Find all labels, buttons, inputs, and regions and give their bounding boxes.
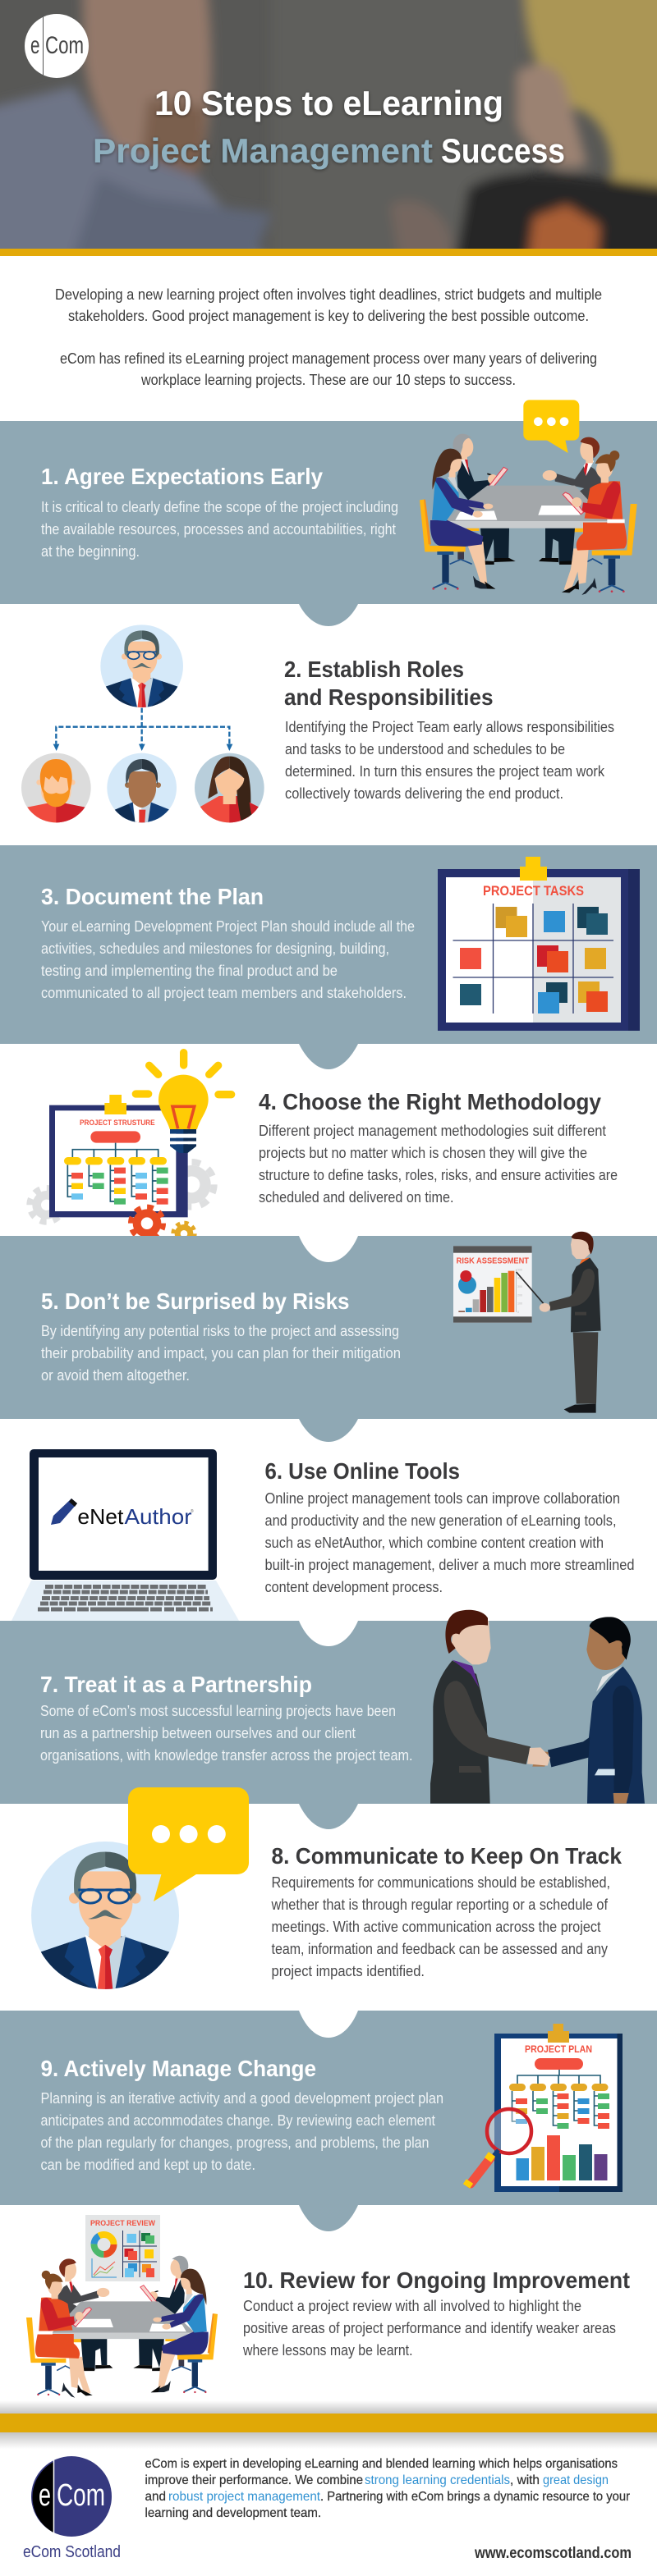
step 5 text: or avoid them altogether. [41,1367,190,1384]
illustration: presenter with risk assessment chart: 300 [517,1285,522,1288]
footer text: learning and development team. [145,2506,321,2520]
step 2 text: collectively towards delivering the end product. [285,785,563,802]
illustration: laptop with eNetAuthor: Author [125,1504,192,1529]
step 1 text: at the beginning. [41,543,140,560]
illustration: team meeting [420,400,637,595]
footer text: , with [510,2473,540,2487]
step 10 heading: 10. Review for Ongoing Improvement [243,2267,630,2293]
step 3 text [41,918,415,1001]
step 2 text: determined. In turn this ensures the project team work [285,763,605,780]
step 3 text: testing and implementing the final product and be [41,963,338,979]
intro text [55,286,602,388]
step 3 text: activities, schedules and milestones for designing, building, [41,940,389,957]
step 1 heading: 1. Agree Expectations Early [41,464,323,489]
step 5 text: By identifying any potential risks to the project and assessing [41,1323,399,1339]
footer text: and [145,2490,166,2504]
step 9 text: can be modified and kept up to date. [41,2157,255,2173]
footer text [145,2457,631,2520]
illustration: manager avatar [31,1842,179,1991]
step 9 text [41,2090,443,2173]
step 5 heading: 5. Don’t be Surprised by Risks [41,1288,350,1314]
footer text: strong learning credentials [365,2473,510,2487]
illustration: project review board: PROJECT REVIEW [90,2219,155,2228]
intro text: workplace learning projects. These are our 10 steps to success. [140,372,516,388]
illustration: presenter with risk assessment chart: 500 [517,1269,522,1272]
footer gold bar with shadow [0,2400,657,2449]
step 7 text: run as a partnership between ourselves and our client [40,1725,356,1741]
step 5 text: their probability and impact, you can plan for their mitigation [41,1345,401,1361]
step 4 text: scheduled and delivered on time. [259,1189,453,1206]
step 6 text: content development process. [264,1579,443,1595]
step 4 text: structure to define tasks, roles, risks, and ensure activities are [259,1167,618,1183]
step 2 text: and tasks to be understood and schedules to be [285,741,565,757]
step 4 heading: 4. Choose the Right Methodology [259,1089,601,1114]
panel: step 7 band [0,1621,657,1829]
step 8 heading: 8. Communicate to Keep On Track [271,1843,622,1869]
illustration: review meeting [26,2256,218,2398]
title: Success [441,131,565,170]
step 9 text: anticipates and accommodates change. By reviewing each element [41,2112,435,2129]
logo: eCom blue [31,2456,112,2537]
illustration: handshake [430,1610,645,1804]
step 8 text: team, information and feedback can be assessed and any [271,1941,608,1957]
footer text: robust project management [168,2490,321,2504]
step 3 heading: 3. Document the Plan [41,884,264,909]
step 6 text: Online project management tools can improve collaboration [264,1490,620,1507]
step 1 text: the available resources, processes and accountabilities, right [41,521,396,538]
illustration: presenter with risk assessment chart [453,1232,601,1413]
step 1 text [41,499,398,560]
illustration: laptop with eNetAuthor [11,1449,239,1621]
illustration: presenter with risk assessment chart: 200 [517,1293,522,1297]
intro text: stakeholders. Good project management is key to delivering the best possible outcome. [68,308,589,324]
logo: eCom white: e [30,32,39,59]
illustration: presenter with risk assessment chart: RISK ASSESSMENT [457,1256,529,1265]
logo: eCom white: Com [45,32,84,59]
step 8 text: Requirements for communications should be established, [271,1874,610,1891]
step 10 text: where lessons may be learnt. [242,2342,412,2359]
step 9 heading: 9. Actively Manage Change [41,2056,316,2081]
illustration: presenter with risk assessment chart: 400 [517,1277,522,1280]
step 7 heading: 7. Treat it as a Partnership [40,1672,312,1697]
footer text: improve their performance. We combine [145,2473,363,2487]
illustration: project review board [85,2215,160,2281]
step 2 heading [284,657,493,710]
step 5 text [41,1323,401,1384]
illustration: project plan clipboard with magnifier [466,2024,623,2192]
illustration: project team hierarchy [21,625,264,826]
step 2 heading: and Responsibilities [284,684,493,710]
step 6 heading: 6. Use Online Tools [264,1458,460,1484]
step 8 text: project impacts identified. [271,1963,425,1979]
title [93,84,565,170]
website: www.ecomscotland.com [474,2545,632,2562]
step 7 text: Some of eCom’s most successful learning projects have been [40,1703,396,1719]
step 2 heading: 2. Establish Roles [284,657,464,682]
step 9 text: of the plan regularly for changes, progress, and problems, the plan [41,2134,429,2151]
step 4 text: Different project management methodologies suit different [259,1123,606,1139]
illustration: laptop with eNetAuthor: eNet [77,1504,124,1529]
panel: step 3 band [0,845,657,1069]
step 4 text [259,1123,618,1206]
illustration: presenter with risk assessment chart: 0 [517,1311,519,1314]
footer text: great design [543,2473,609,2487]
step 7 text: organisations, with knowledge transfer across the project team. [40,1747,412,1764]
footer text: eCom is expert in developing eLearning and blended learning which helps organisations [145,2457,618,2471]
step 7 text [40,1703,412,1764]
title: Project Management [93,131,433,170]
gold bar [0,249,657,256]
footer text: . Partnering with eCom brings a dynamic resource to your [320,2490,631,2504]
step 2 text [285,719,614,802]
step 2 text: Identifying the Project Team early allows responsibilities [285,719,614,735]
illustration: presenter with risk assessment chart: 100 [517,1302,522,1306]
step 10 text [242,2298,616,2359]
illustration: project tasks board [438,857,640,1031]
illustration: project tasks board: PROJECT TASKS [483,883,584,899]
logo: eCom blue: Com [57,2478,105,2513]
step 6 text: such as eNetAuthor, which combine content creation with [264,1535,604,1551]
panel: step 5 band [0,1236,657,1442]
step 8 text: whether that is through regular reporting or a schedule of [271,1897,609,1913]
illustration: project structure with light bulb [30,1053,232,1245]
step 10 text: Conduct a project review with all involved to highlight the [243,2298,581,2314]
step 10 text: positive areas of project performance and identify weaker areas [243,2320,616,2336]
logo: eCom blue: e [39,2478,51,2513]
step 9 text: Planning is an iterative activity and a good development project plan [41,2090,443,2107]
icon: speech bubble [128,1787,249,1901]
step 8 text: meetings. With active communication across the project [271,1919,601,1935]
panel: step 1 band [0,421,657,626]
step 4 text: projects but no matter which is chosen they will give the [259,1145,587,1161]
step 3 text: communicated to all project team members and stakeholders. [41,985,407,1001]
step 3 text: Your eLearning Development Project Plan should include all the [41,918,415,935]
step 8 text [271,1874,610,1979]
illustration: project structure with light bulb: PROJECT STRUSTURE [80,1119,155,1127]
intro text: Developing a new learning project often involves tight deadlines, strict budgets and multiple [55,286,602,303]
illustration: laptop with eNetAuthor: ® [191,1508,194,1514]
intro text: eCom has refined its eLearning project management process over many years of delivering [60,350,597,367]
brand name: eCom Scotland [23,2543,121,2561]
panel: step 9 band [0,2011,657,2231]
step 6 text: and productivity and the new generation of eLearning tools, [264,1512,616,1529]
hero photo [0,0,657,249]
title: 10 Steps to eLearning [154,84,503,122]
illustration: project plan clipboard with magnifier: PROJECT PLAN [525,2043,592,2055]
step 1 text: It is critical to clearly define the scope of the project including [41,499,398,515]
logo: eCom white [25,14,89,78]
step 6 text [264,1490,634,1595]
